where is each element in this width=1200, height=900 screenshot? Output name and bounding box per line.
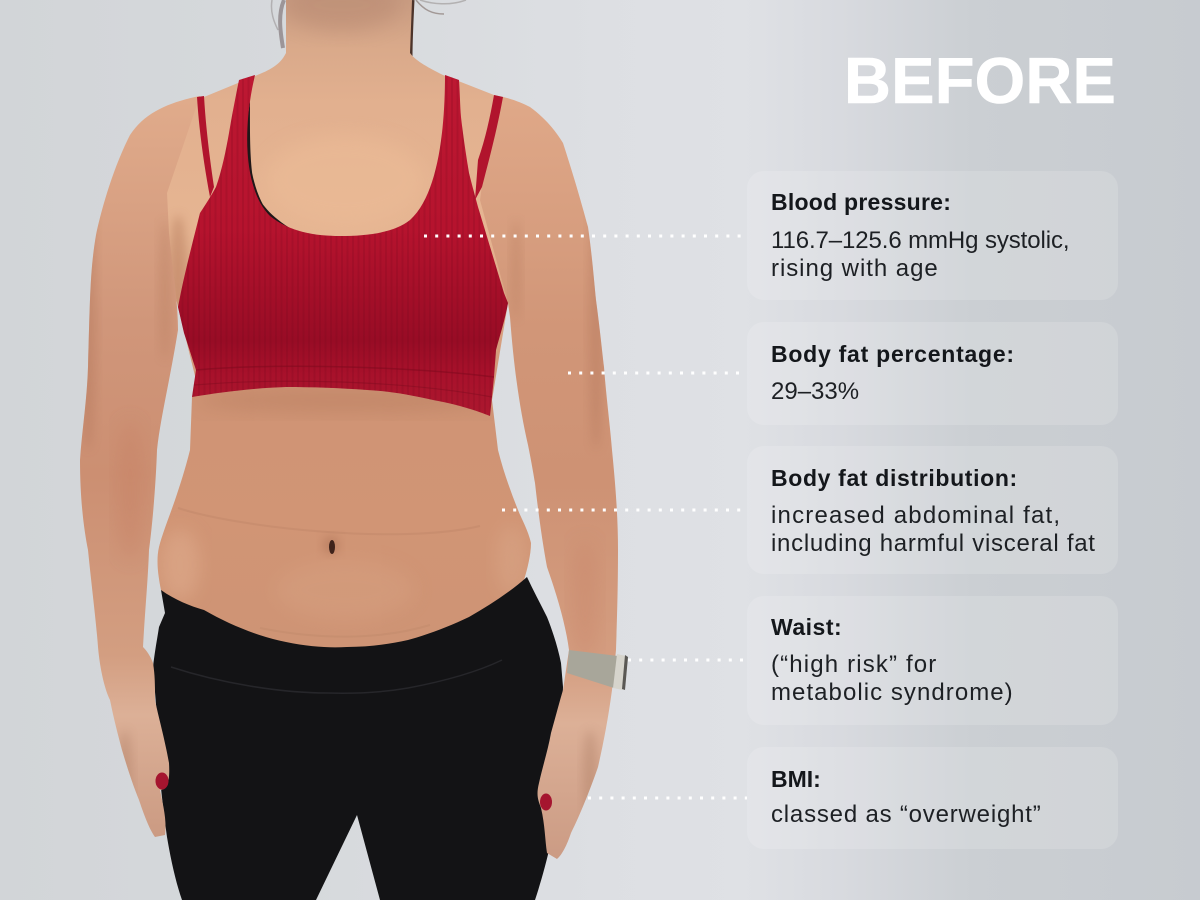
title: BEFORE [844,44,1116,117]
text: waist value: (“high risk” for [771,651,937,678]
black leggings [153,577,563,900]
text: body fat distribution value [771,502,1096,557]
hair [271,0,466,56]
icon: watch [567,650,628,690]
connector: waist [628,658,747,662]
text: body fat percentage value: 29–33% [771,378,859,405]
text: blood pressure value: 116.7–125.6 mmHg systolic, [771,227,1069,254]
panel: blood pressure [747,171,1118,300]
heading: blood pressure: Blood pressure: [771,189,951,215]
text: waist value [771,651,1014,706]
nails [156,772,552,810]
torso skin [155,0,540,660]
arm: right [480,95,618,859]
heading: waist: Waist: [771,614,842,640]
heading: body fat percentage: Body fat percentage: [771,341,1015,367]
connector: body fat distribution [502,508,747,512]
dark under layer strap [246,100,298,233]
arm: left [80,96,200,837]
panel: BMI [747,747,1118,849]
panel: waist [747,596,1118,725]
red bra top [178,75,508,416]
heading: BMI: BMI: [771,766,821,792]
text: body fat distribution value: including harmful visceral fat [771,530,1096,557]
connector: blood pressure [424,234,747,238]
connector: BMI [588,796,747,800]
thin strap: left [197,96,214,197]
panel: body fat percentage [747,322,1118,425]
panel: body fat distribution [747,446,1118,574]
text: body fat distribution value: increased abdominal fat, [771,502,1061,529]
text: waist value: metabolic syndrome) [771,679,1014,706]
text: blood pressure value: rising with age [771,255,939,282]
thin strap: right [475,95,503,200]
navel [323,536,339,554]
text: blood pressure value [771,227,1069,282]
text: BMI value: classed as “overweight” [771,801,1042,828]
figure: woman's torso in red top and black leggings [80,0,747,900]
heading: body fat distribution: Body fat distribution: [771,465,1018,491]
connector: body fat percentage [568,372,747,374]
